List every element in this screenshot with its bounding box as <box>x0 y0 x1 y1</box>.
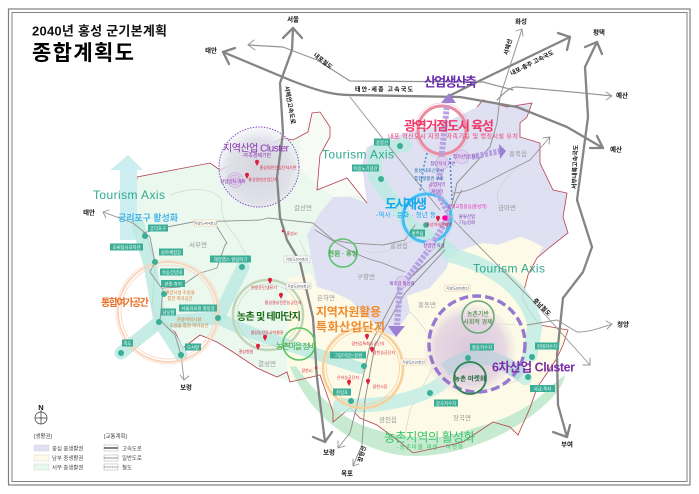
road and destination labels: 목포 <box>341 470 353 478</box>
road and destination labels: 서부내륙고속국도 <box>570 144 580 189</box>
ring: integrated leisure space <box>116 260 220 364</box>
road and destination labels: 태안 <box>205 46 217 54</box>
teal place labels: 용봉산 <box>376 139 388 145</box>
purple and orange small captions: 해양시설 조성을 <box>165 289 195 296</box>
road and destination labels: 태안 <box>83 208 95 216</box>
teal location markers <box>118 143 535 404</box>
main theme labels: 지역자원활용 <box>316 305 381 319</box>
highway: Naepo-Chungju expressway <box>447 37 570 97</box>
rings <box>116 103 525 408</box>
town names: 구항면 <box>357 272 375 281</box>
main theme labels: 농촌 및 테마단지 <box>237 310 301 323</box>
highway: Seobu inland expressway <box>557 42 597 437</box>
tourism axis bands <box>110 145 535 405</box>
ring: rural living and recreation <box>329 239 357 267</box>
legend: transport plan: 철도 <box>122 464 132 472</box>
rail: east dotted branch <box>497 87 612 100</box>
cluster disc <box>219 127 299 207</box>
road and destination labels: 충남철도 <box>531 296 553 318</box>
road and destination labels: 태안-세종 고속국도 <box>355 86 413 94</box>
town names: 장곡면 <box>453 413 471 422</box>
road and destination labels: 청양 <box>617 320 629 328</box>
region: central living zone <box>307 100 568 336</box>
main theme labels: Tourism Axis <box>93 188 165 202</box>
purple and orange small captions: 산업면 육성 <box>423 242 445 249</box>
purple and orange small captions: 기능강화 <box>459 219 475 226</box>
legend: living zones: 중심 중생활권 <box>52 444 83 452</box>
legend: transport plan: 고속도로 <box>122 444 142 452</box>
panel: map regions <box>127 100 568 456</box>
icon: north arrow <box>35 403 47 424</box>
teal place labels: 관광·휴지 <box>164 280 182 288</box>
ring: sixth industry cluster <box>429 296 525 392</box>
town names: 금마면 <box>498 203 516 212</box>
band: southern tourism axis <box>340 361 525 405</box>
boundary: county red outline <box>127 100 568 453</box>
teal place labels: 조류탐사과학관 <box>112 244 141 251</box>
road and destination labels: 서울 <box>287 14 299 24</box>
arrow: western tourism axis <box>110 155 143 240</box>
band: southern rural green band <box>290 366 565 456</box>
road and destination labels: 내포-충주 고속국도 <box>509 48 556 77</box>
road and destination labels: 서해선 <box>502 38 514 56</box>
purple and orange small captions: 광역교통중심(홍성역) <box>447 203 487 210</box>
road number signs: 지방도619호선 <box>402 360 425 365</box>
town names: 갈산면 <box>294 203 312 212</box>
main theme labels: 사회적 경제 <box>463 318 493 326</box>
band: central tourism axis <box>375 145 450 250</box>
main theme labels: 농촌마을 정비 <box>276 341 316 351</box>
purple and orange small captions: 공업지역 <box>429 181 445 188</box>
arrowheads: thin roads <box>103 29 612 466</box>
town names: 서부면 <box>189 240 207 249</box>
road number signs <box>194 220 470 365</box>
main theme labels: 궁리포구 활성화 <box>118 212 179 223</box>
rail: Seohae line <box>338 29 522 448</box>
arrow: east to Hongbuk <box>472 144 506 159</box>
teal place labels: 해양랩스 힐링파크 <box>214 256 247 263</box>
band: central east-west axis <box>218 318 360 368</box>
road number signs: 지방도404호선 <box>194 221 217 226</box>
zone: social economy blob <box>424 304 516 396</box>
main theme labels: 농촌지역의 활성화 <box>384 430 475 444</box>
small red captions: 홍성역세권개발 <box>426 221 452 227</box>
road and destination labels: 평택 <box>593 28 605 36</box>
road and destination labels: 부여 <box>561 440 573 448</box>
teal place labels: 죽도 <box>123 341 132 347</box>
purple and orange small captions: 산업단지 계획 <box>220 178 246 185</box>
title line 2: 종합계획도 <box>32 42 134 65</box>
arrow: north to industrial axis <box>439 93 456 180</box>
road and destination labels: 보령 <box>323 448 335 456</box>
town names: 홍성읍 <box>390 241 408 250</box>
main theme labels: 산업생산축 <box>424 74 477 90</box>
road and destination labels: 서해안고속도로 <box>283 85 297 125</box>
town names <box>189 149 527 424</box>
small red captions: 광천김특화농공단지 <box>351 340 385 346</box>
legend: living zones: 남부 중생활권 <box>52 454 83 462</box>
region: southern living zone <box>287 237 568 453</box>
legend: living zones: [생활권] <box>34 432 52 440</box>
legend <box>34 432 142 472</box>
purple and orange small captions <box>165 153 487 329</box>
arrow: south corridor <box>388 192 450 337</box>
town names: 홍북읍 <box>509 149 527 158</box>
small red captions: 결성향원 <box>239 348 254 354</box>
main theme labels: 농촌 마켓화 <box>454 374 486 382</box>
main theme labels: 특화산업단지 <box>316 319 385 334</box>
road and destination labels: 보령 <box>180 382 192 392</box>
teal place labels: 승마체험장 <box>161 249 181 256</box>
planned industrial park <box>228 172 242 188</box>
main theme labels: 통합여가공간 <box>101 296 149 309</box>
main theme labels: -역사 · 문화 · 청년 등 <box>376 210 436 219</box>
main theme labels: 도시재생 <box>385 196 427 212</box>
road number signs: 지방도609호선 <box>446 286 469 291</box>
band: blue reservoir band <box>445 357 522 375</box>
purple and orange small captions: 관광숙박시설 <box>177 316 201 323</box>
small red captions: 결성농장동사박물관 <box>250 329 284 335</box>
road number signs: 지방도606호선 <box>286 257 308 262</box>
blue dotted links <box>420 153 452 200</box>
purple nodes <box>396 150 469 288</box>
teal place labels: 오서항 <box>187 344 199 351</box>
teal place labels: 천태저수지 <box>537 343 557 350</box>
teal place labels: 홍주읍 <box>411 230 424 237</box>
small red captions: 은하농공단지 <box>337 374 359 380</box>
small red captions: 홍성IC <box>286 230 298 236</box>
ring: rural market <box>454 362 486 394</box>
title <box>32 24 167 65</box>
road and destination labels: 화성 <box>515 16 527 26</box>
small red captions: 광천IC <box>301 367 313 373</box>
ring: regional resource industry <box>323 328 403 408</box>
thin regional roads <box>103 97 612 380</box>
title line 1: 2040년 홍성 군기본계획 <box>32 24 167 38</box>
road and destination labels: 내포철도 <box>312 51 335 71</box>
main theme labels: 광역거점도시 육성 <box>404 118 494 134</box>
town names: 홍동면 <box>418 300 436 309</box>
ring: urban regeneration <box>400 192 454 244</box>
teal place labels: 남당항 <box>162 309 175 315</box>
ring: metropolitan hub city <box>415 103 469 157</box>
teal place labels: 장곡저수지 <box>436 400 456 407</box>
main theme labels: 지역산업 Cluster <box>223 142 290 154</box>
teal place labels: 그림이있는정원 <box>334 352 362 359</box>
band: Jukdo to Seobu axis <box>121 267 243 353</box>
rail: Naepo railway <box>248 45 513 90</box>
zone: regional industry cluster <box>219 127 299 207</box>
teal place labels: 사금·죽지 <box>534 386 551 392</box>
main theme labels: 내포 혁신도시 지정 · 자족기능 및 행정시설 유치 <box>388 132 518 140</box>
legend: living zones: 서부 중생활권 <box>52 464 83 472</box>
region: white-green northern area <box>300 112 360 197</box>
purple and orange small captions: 조성을 통한 여가공간 <box>170 322 208 329</box>
purple and orange small captions: 물류산업 <box>459 213 475 220</box>
road number signs: 지방도606호선 <box>287 284 310 289</box>
small red captions: 홍성일반산업단지 <box>248 176 278 182</box>
ring: rural and theme complex <box>233 280 303 350</box>
small red captions: 홍성결성전문농공단지 <box>265 299 302 305</box>
purple and orange small captions: 통합생활권 구축 <box>414 175 444 182</box>
main theme labels: -농촌마을 재생 · 마켓화 <box>397 443 463 451</box>
small red captions: 광천시장 <box>373 383 388 389</box>
main theme labels: 전원 · 휴양 <box>328 248 358 258</box>
town boundaries <box>170 165 520 435</box>
main theme labels: Tourism Axis <box>473 262 545 276</box>
small red captions: 한용운인생뮤기 <box>251 284 277 290</box>
town names: 광천읍 <box>379 415 397 424</box>
teal place labels: 서울의료원 힐링장 <box>181 305 215 312</box>
teal place labels: 속동전망대 <box>162 269 182 276</box>
road and destination labels: 장항선 <box>356 445 368 463</box>
town names: 은하면 <box>317 293 335 302</box>
arrowheads: expressways <box>223 28 603 442</box>
main theme labels: 6차산업 Cluster <box>492 360 575 374</box>
small red captions: 홍성일반산업단지기관 <box>260 164 297 170</box>
main theme labels <box>93 74 575 451</box>
main theme labels: -자족경제기반 <box>242 152 272 159</box>
purple and orange small captions: 홍성·내포신도시 <box>414 167 444 174</box>
ring: rural village renewal <box>283 328 315 360</box>
band: west coast axis <box>138 225 181 355</box>
rail: Janghang line <box>353 250 445 466</box>
road and destination labels <box>83 14 629 478</box>
region: western living zone <box>127 112 367 382</box>
small red captions: 광천농공단지 <box>373 349 395 355</box>
legend: living zones <box>34 432 83 472</box>
teal place labels: 궁리포구 <box>150 225 166 232</box>
red map pins <box>245 160 448 386</box>
teal place labels <box>110 138 559 407</box>
purple nodes and arrows <box>388 93 506 337</box>
teal place labels: 천립포 <box>336 389 348 395</box>
band: eastern tourism axis <box>450 255 535 355</box>
legend: transport plan: 일반도로 <box>122 454 142 462</box>
purple and orange small captions: 첨가산업단지 <box>453 153 477 160</box>
main theme labels: 농촌기반 <box>467 310 490 318</box>
highway: Taean-Sejong expressway <box>223 52 603 148</box>
purple and orange small captions: 재정비 <box>431 188 443 195</box>
town names: 결성면 <box>258 359 276 368</box>
legend: transport plan <box>104 432 142 472</box>
road and destination labels: 예산 <box>610 144 622 154</box>
road and destination labels: 예산 <box>616 90 628 100</box>
legend: transport plan: [교통계획] <box>104 432 127 440</box>
purple and orange small captions: 제조업 활성화 <box>389 280 415 287</box>
highway: Seohaean expressway <box>277 28 325 442</box>
teal place labels: 이응노기념관 <box>353 165 378 172</box>
roads <box>103 28 612 466</box>
purple and orange small captions: 첨단지식 기반 <box>430 160 456 167</box>
main theme labels: Tourism Axis <box>322 148 394 162</box>
small red captions <box>239 164 452 389</box>
icon: north arrow: N <box>38 403 44 412</box>
purple and orange small captions: 통한 여가공간 <box>167 295 193 302</box>
ring: social economy <box>462 301 494 333</box>
teal place labels: 홍동저수지 <box>472 344 492 351</box>
